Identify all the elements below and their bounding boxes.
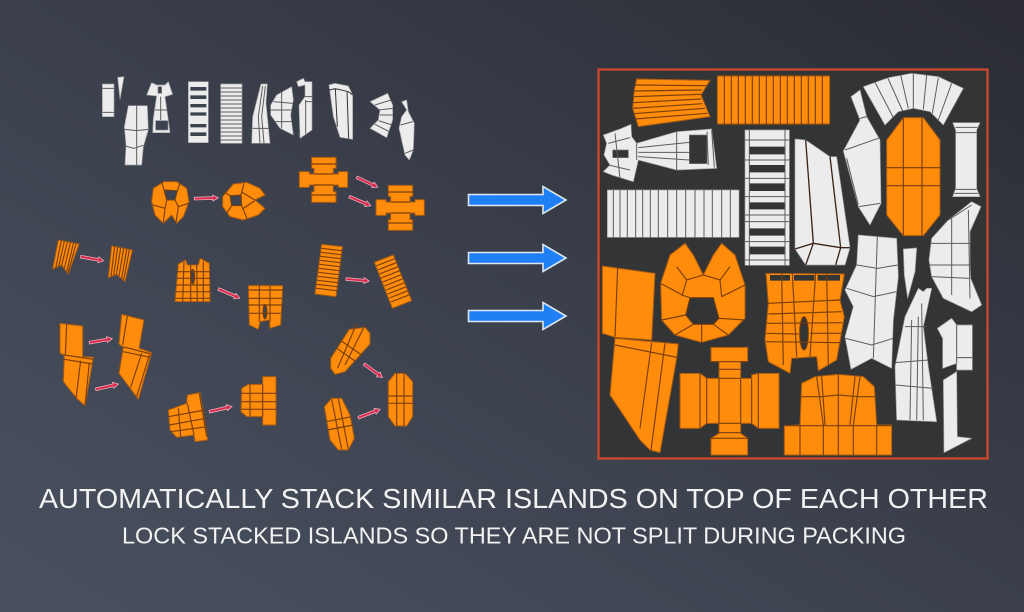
red arrow <box>95 381 119 392</box>
orange grid island <box>765 273 844 373</box>
orange island: cross stacked <box>376 185 424 230</box>
orange island: fan right <box>108 246 132 282</box>
blue arrow 3 <box>468 302 566 330</box>
orange island: vest right <box>248 286 283 329</box>
orange island: strip right <box>374 255 412 308</box>
orange lower block <box>610 338 678 453</box>
red arrow <box>89 336 113 346</box>
orange island: arch right <box>241 377 276 425</box>
white pillar <box>953 123 980 197</box>
blue arrow 2 <box>468 244 566 272</box>
blue arrow 1 <box>468 186 566 214</box>
white island: legs <box>124 106 148 165</box>
red arrow <box>357 407 381 420</box>
white tall curved island <box>895 288 937 422</box>
white coffin <box>843 90 881 225</box>
orange strip <box>717 76 830 124</box>
red arrow <box>209 403 233 415</box>
red arrow <box>194 195 218 202</box>
orange fan <box>633 79 710 127</box>
orange island: strip left <box>315 244 342 297</box>
white ladder <box>745 130 789 265</box>
red arrow <box>217 286 241 301</box>
white island: sliver <box>118 77 124 99</box>
white island: ladder <box>188 82 208 143</box>
subtitle: LOCK STACKED ISLANDS SO THEY ARE NOT SPLIT DURING PACKING <box>122 522 906 548</box>
stacked orange island pairs, top <box>152 157 424 230</box>
white island: tall block <box>297 78 312 138</box>
orange arch <box>784 374 892 455</box>
title: AUTOMATICALLY STACK SIMILAR ISLANDS ON TOP OF EACH OTHER <box>39 483 988 514</box>
white island: coffin <box>399 100 414 160</box>
orange upper block <box>602 266 655 340</box>
panel frame <box>598 70 988 458</box>
white island: tapered block <box>329 83 353 139</box>
orange island: L piece right <box>119 314 152 399</box>
orange island: L piece left <box>60 323 93 406</box>
white arc <box>863 73 963 125</box>
white small tall island <box>937 318 972 370</box>
orange island: vest left <box>175 258 210 302</box>
orange octagon <box>887 118 940 236</box>
panel islands, lower half <box>602 243 972 455</box>
white island: strip <box>221 84 242 143</box>
blue arrows <box>468 186 566 330</box>
red arrow <box>348 194 372 209</box>
orange island: arch left <box>168 393 208 442</box>
red arrow <box>80 254 104 264</box>
orange island: cross <box>299 157 348 202</box>
stacked orange island pairs, lower <box>53 240 413 450</box>
orange island: octagon lower <box>324 398 354 450</box>
panel islands, upper half <box>603 73 982 369</box>
white island: shield <box>271 87 293 135</box>
white island: arc <box>370 93 393 138</box>
white sliver <box>903 248 917 298</box>
white legs <box>845 235 898 369</box>
red arrow <box>346 276 370 284</box>
red arrow <box>362 362 384 380</box>
white dress <box>603 124 717 182</box>
panel: packed UV layout <box>598 70 988 458</box>
orange island: octagon top <box>331 324 370 374</box>
white shield <box>929 202 982 312</box>
white island: pillar <box>102 84 114 117</box>
orange island: mask left <box>152 182 189 223</box>
white lower sliver island <box>943 372 972 453</box>
orange island: octagon right <box>388 373 413 426</box>
white strip <box>607 190 739 237</box>
orange island: mask right <box>223 182 265 220</box>
orange island: fan left <box>53 240 79 274</box>
orange cross <box>680 347 779 455</box>
orange mask <box>661 243 745 342</box>
white island: curved strip <box>252 84 270 143</box>
white island: dress <box>147 82 173 133</box>
red arrow <box>355 175 379 190</box>
white tapered block <box>795 139 850 265</box>
unstacked white islands row <box>102 77 414 165</box>
